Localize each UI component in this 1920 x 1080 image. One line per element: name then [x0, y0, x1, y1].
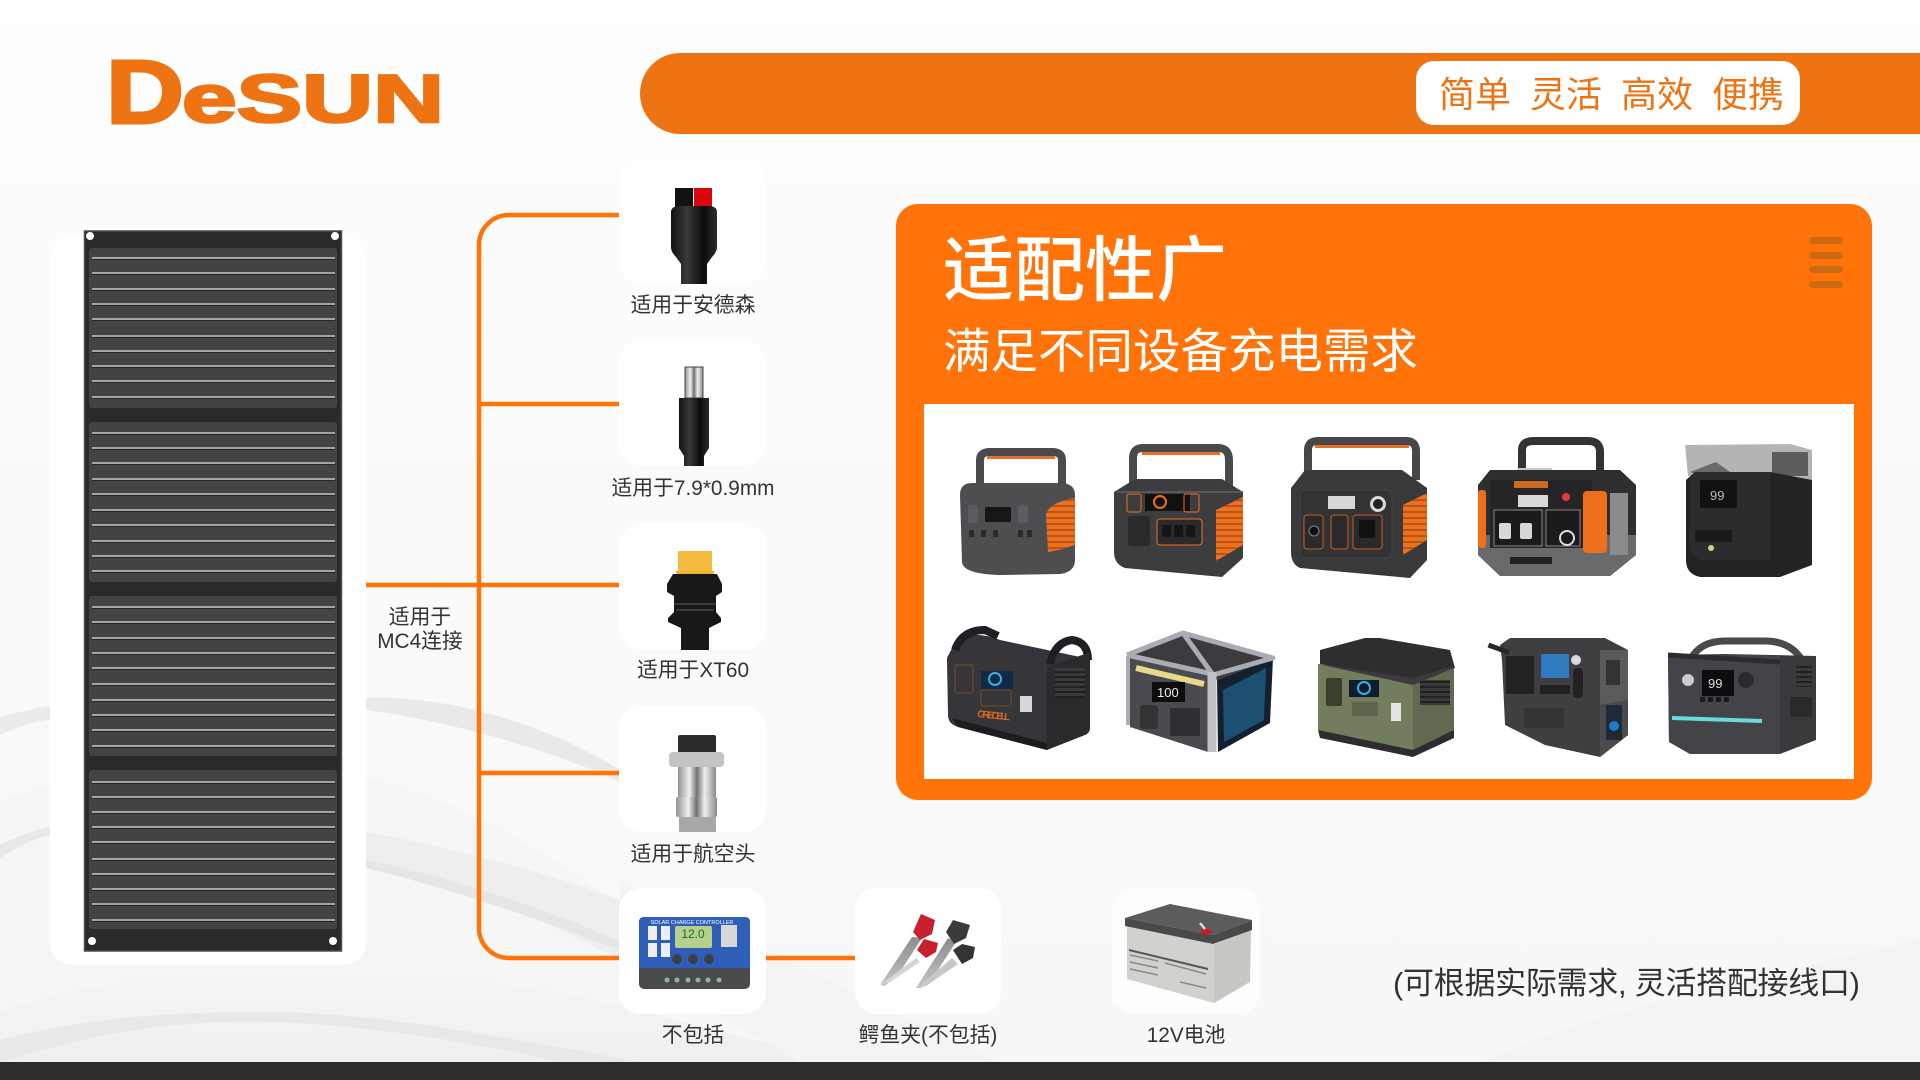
tile: XT60 connector	[619, 524, 766, 650]
label: alligator clips: 鳄鱼夹(不包括)	[859, 1024, 997, 1047]
device 6	[947, 630, 1090, 750]
device 6: GRECELL	[977, 709, 1011, 723]
tile: 7.9*0.9mm plug	[619, 340, 766, 466]
tile: aviation plug	[619, 706, 766, 832]
tile: alligator clips	[855, 888, 1001, 1014]
icon: menu bars	[1809, 237, 1843, 288]
device 7: 100	[1157, 685, 1179, 700]
note: flexible wiring: (可根据实际需求, 灵活搭配接线口)	[1393, 966, 1860, 1001]
label: Anderson: 适用于安德森	[631, 294, 756, 317]
label: 12V battery: 12V电池	[1147, 1024, 1225, 1047]
label: XT60: 适用于XT60	[637, 659, 749, 682]
device 1	[960, 452, 1075, 575]
device image area	[924, 404, 1854, 779]
device 3	[1291, 441, 1427, 578]
logo: Desun	[106, 43, 444, 143]
device 10: 99	[1708, 676, 1722, 691]
footer bar	[0, 1062, 1920, 1080]
slogan pill: 简单	[1439, 74, 1511, 115]
tile: charge controller	[619, 888, 766, 1014]
label: MC4 connection: 适用于	[389, 606, 451, 629]
device 5	[1685, 444, 1812, 577]
device 10	[1668, 641, 1816, 754]
device 9	[1488, 638, 1628, 757]
device 7	[1127, 633, 1273, 752]
tile: charge controller: SOLAR CHARGE CONTROLLER	[651, 920, 733, 926]
tile: charge controller: 12.0	[681, 927, 705, 941]
tile: Anderson connector	[619, 158, 766, 284]
label: aviation plug: 适用于航空头	[631, 843, 755, 866]
connector lines	[366, 215, 855, 958]
slogan pill	[1416, 61, 1800, 125]
heading: 适配性广	[943, 232, 1227, 311]
device 4	[1478, 441, 1636, 576]
label: not included: 不包括	[662, 1024, 724, 1047]
label: MC4 connection	[377, 606, 463, 653]
slogan pill: 灵活	[1530, 74, 1602, 115]
subheading: 满足不同设备充电需求	[943, 326, 1418, 379]
top orange banner	[640, 53, 1920, 134]
panel: solar panel card	[50, 231, 366, 965]
label: 7.9*0.9mm: 适用于7.9*0.9mm	[612, 477, 774, 500]
device 5: 99	[1710, 488, 1724, 503]
slogan pill: 高效	[1621, 74, 1693, 115]
device 8	[1318, 638, 1455, 757]
tile: 12V battery	[1112, 888, 1260, 1014]
device 2	[1114, 448, 1243, 577]
label: MC4 connection: MC4连接	[377, 630, 463, 653]
slogan pill: 便携	[1712, 74, 1784, 115]
logo: Desun: D	[106, 43, 184, 143]
panel: wide compatibility	[896, 204, 1872, 800]
logo: Desun: eSUN	[182, 61, 444, 137]
